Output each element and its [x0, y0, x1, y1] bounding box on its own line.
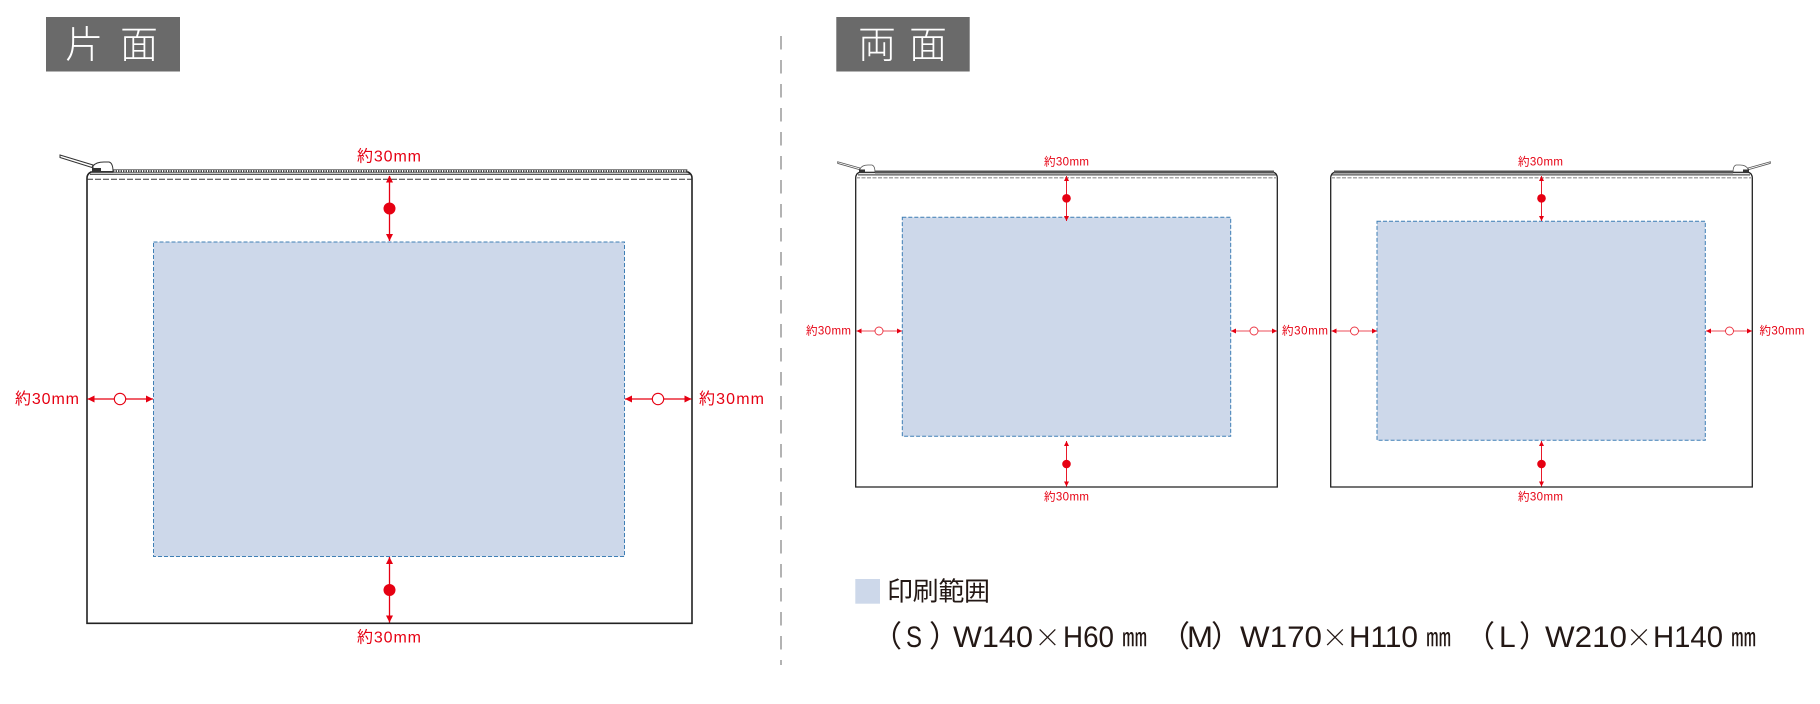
size L: W210	[1545, 621, 1627, 654]
size M: ㎜	[1426, 618, 1451, 654]
dimension: left margin	[806, 324, 902, 338]
size M: W170	[1240, 621, 1322, 654]
size L	[1465, 618, 1756, 655]
dimension: left margin: 約30mm	[806, 324, 851, 338]
dimension: left margin	[1332, 327, 1377, 335]
size S: W140	[953, 621, 1033, 654]
panel: single-sided	[15, 14, 764, 646]
pouch outline	[1331, 162, 1770, 487]
heading: 両面: 面	[909, 14, 947, 69]
print area	[154, 242, 624, 556]
dimension: left margin: 約30mm	[15, 390, 79, 408]
size S: H60	[1063, 621, 1114, 654]
dimension: right margin	[625, 390, 764, 408]
dimension: right margin	[1231, 324, 1328, 338]
dimension: top margin	[1518, 155, 1563, 221]
size M: ×	[1322, 618, 1348, 655]
dimension: right margin: 約30mm	[1282, 324, 1328, 338]
heading: 片面: 面	[120, 14, 158, 69]
dimension: top margin	[357, 148, 421, 241]
dimension: top margin	[1044, 155, 1089, 221]
size L: H140	[1653, 621, 1723, 654]
dimension: top margin: 約30mm	[357, 148, 421, 166]
size M: （	[1160, 621, 1190, 654]
dimension: right margin: 約30mm	[1760, 324, 1804, 338]
dimension: left margin	[15, 390, 153, 408]
dimension: top margin: 約30mm	[1518, 155, 1563, 169]
size S: （	[872, 621, 902, 654]
center divider	[780, 36, 782, 665]
size L: ×	[1626, 618, 1652, 655]
size S: ㎜	[1122, 618, 1147, 654]
panel: double-sided back	[1331, 155, 1804, 504]
dimension: bottom margin: 約30mm	[357, 628, 421, 646]
pouch outline	[838, 162, 1277, 487]
dimension: right margin: 約30mm	[699, 390, 764, 408]
dimension: bottom margin	[1518, 441, 1563, 504]
pouch outline	[60, 155, 692, 623]
size M: H110	[1349, 621, 1418, 654]
size L: （	[1465, 621, 1495, 654]
heading: 両面	[836, 14, 970, 72]
size S	[872, 618, 1147, 655]
heading: 片面: 片	[65, 14, 103, 69]
size M	[1160, 618, 1451, 655]
size S: S	[906, 621, 922, 654]
dimension: bottom margin	[357, 557, 421, 646]
size S: ×	[1034, 618, 1061, 655]
dimension: bottom margin: 約30mm	[1518, 490, 1563, 504]
size L: ㎜	[1731, 618, 1756, 654]
size S: ）	[929, 621, 959, 654]
heading: 両面: 両	[858, 14, 896, 69]
panel: double-sided front	[806, 155, 1328, 504]
size L: ）	[1519, 621, 1549, 654]
dimension: right margin	[1706, 324, 1804, 338]
size M: ）	[1211, 621, 1241, 654]
legend: print area: 印刷範囲	[887, 576, 990, 606]
dimension: bottom margin: 約30mm	[1044, 490, 1089, 504]
dimension: top margin: 約30mm	[1044, 155, 1089, 169]
size M: M	[1187, 621, 1213, 654]
dimension: bottom margin	[1044, 441, 1089, 504]
size L: L	[1499, 621, 1516, 654]
print area	[1377, 221, 1705, 440]
size list	[872, 618, 1756, 655]
heading: 片面	[46, 14, 180, 72]
print area	[902, 217, 1231, 436]
